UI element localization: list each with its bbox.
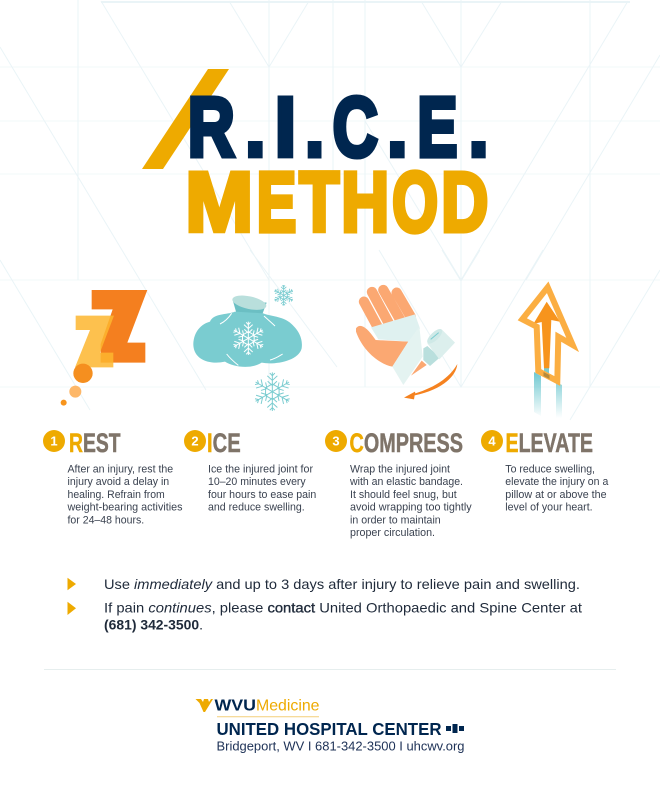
number badge 3: [325, 430, 347, 452]
description: Ice the injured joint for: [208, 464, 313, 476]
hospital name: UNITED HOSPITAL CENTER: [216, 719, 442, 739]
heading: METHOD: H: [341, 155, 389, 250]
description: [208, 464, 316, 514]
description: 10–20 minutes every: [208, 476, 306, 488]
address line: Bridgeport, WV I 681-342-3500 I uhcwv.org: [216, 739, 464, 754]
accent slash: [142, 69, 229, 169]
description: proper circulation.: [350, 527, 435, 539]
description: [349, 464, 472, 539]
icon: ice pack with snowflakes: [193, 285, 302, 411]
bullet arrow: [68, 602, 76, 615]
description: Wrap the injured joint: [350, 464, 450, 476]
description: [67, 464, 183, 526]
heading: R.I.C.E.: .: [305, 81, 324, 175]
description: level of your heart.: [505, 502, 593, 514]
description: To reduce swelling,: [505, 464, 595, 476]
description: four hours to ease pain: [208, 489, 316, 501]
icon: bandaged hand: [356, 290, 457, 399]
bullet arrow: [68, 578, 76, 590]
icon: elevate arrow: [522, 287, 573, 428]
note: contact: [68, 600, 582, 632]
number badge 4: 4: [488, 434, 496, 449]
icon: hospital cross: [446, 724, 464, 733]
description: weight-bearing activities: [67, 502, 183, 514]
note: when to use: [68, 576, 580, 592]
description: for 24–48 hours.: [68, 514, 144, 526]
description: and reduce swelling.: [208, 502, 305, 514]
heading: ICE: ICE: [207, 428, 241, 458]
number badge 3: 3: [332, 434, 340, 449]
heading: METHOD: [185, 155, 488, 250]
heading: R.I.C.E.: R: [188, 80, 235, 174]
icon: flying WV: [196, 699, 213, 712]
description: After an injury, rest the: [68, 464, 173, 476]
note text line 1: If pain continues, please contact United Orthopaedic and Spine Center at: [104, 600, 582, 616]
description: injury avoid a delay in: [68, 476, 169, 488]
description: in order to maintain: [350, 514, 441, 526]
description: It should feel snug, but: [350, 489, 457, 501]
heading: R.I.C.E.: E: [417, 80, 457, 174]
description: elevate the injury on a: [505, 476, 608, 488]
icon: curved arrow: [404, 364, 457, 399]
number badge 1: [43, 430, 65, 452]
heading: METHOD: E: [257, 156, 296, 250]
heading: COMPRESS: COMPRESS: [350, 428, 463, 458]
description: with an elastic bandage.: [349, 476, 463, 488]
number badge 2: 2: [191, 434, 199, 449]
heading: R.I.C.E.: I: [274, 80, 296, 175]
step 4: elevate: [481, 428, 608, 514]
heading: METHOD: M: [185, 155, 253, 249]
heading: METHOD: D: [441, 155, 488, 249]
icon: sleeping Zs: [61, 290, 147, 406]
title: [142, 69, 489, 250]
heading: METHOD: T: [299, 155, 339, 249]
heading: R.I.C.E.: C: [333, 80, 378, 174]
logo: WVU Medicine / United Hospital Center: [196, 698, 464, 754]
description: [505, 464, 608, 514]
heading: R.I.C.E.: .: [469, 79, 489, 174]
step 1: rest: [43, 428, 183, 526]
wordmark: WVU: WVU: [214, 698, 256, 714]
heading: R.I.C.E.: [188, 79, 489, 175]
step 2: ice: [184, 428, 316, 514]
note text: Use immediately and up to 3 days after injury to relieve pain and swelling.: [104, 576, 580, 592]
heading: R.I.C.E.: .: [245, 80, 266, 174]
description: healing. Refrain from: [68, 489, 165, 501]
description: avoid wrapping too tightly: [350, 502, 472, 514]
step 3: compress: [325, 428, 472, 539]
note text line 2: phone: (681) 342-3500.: [104, 616, 203, 632]
heading: REST: REST: [69, 428, 121, 458]
heading: METHOD: O: [392, 156, 438, 250]
wordmark: Medicine: Medicine: [256, 698, 320, 714]
number badge 1: 1: [50, 434, 58, 449]
heading: ELEVATE: ELEVATE: [506, 428, 593, 458]
description: pillow at or above the: [505, 489, 607, 501]
heading: R.I.C.E.: .: [387, 80, 408, 174]
